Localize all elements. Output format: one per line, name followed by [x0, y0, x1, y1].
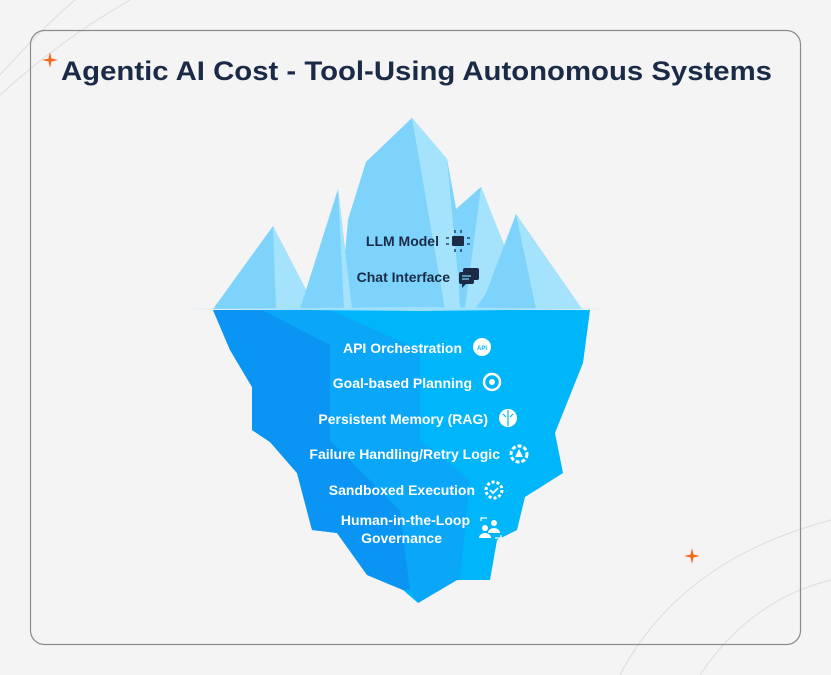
item: Human-in-the-Loop Governance — [341, 512, 501, 546]
item: Sandboxed Execution: Sandboxed Execution — [329, 482, 475, 498]
text: Chat Interface — [357, 268, 479, 288]
text: Chat Interface: Chat Interface — [357, 269, 450, 285]
iceberg: above water — [213, 118, 582, 309]
item: API Orchestration: API Orchestration — [343, 340, 462, 356]
icon: sparkle top-left — [42, 52, 58, 68]
list: underwater items — [309, 338, 527, 546]
item: API Orchestration: API — [477, 346, 487, 352]
item: Human-in-the-Loop Governance: Human-in-the-Loop — [341, 512, 470, 528]
item: Human-in-the-Loop Governance: Governance — [361, 530, 442, 546]
icon: chat bubbles — [459, 268, 479, 288]
item: Goal-based Planning: Goal-based Planning — [333, 375, 472, 391]
item: Failure Handling: Failure Handling/Retry Logic — [309, 446, 500, 462]
waterline — [187, 307, 607, 311]
iceberg: underwater — [213, 310, 590, 603]
text: LLM Model — [366, 230, 470, 252]
icon: chip — [446, 230, 470, 252]
title: Agentic AI Cost - Tool-Using Autonomous Systems — [61, 56, 772, 86]
icon: sparkle bottom-right — [684, 548, 700, 564]
item: Persistent Memory: Persistent Memory (RAG) — [318, 411, 488, 427]
text: LLM Model: LLM Model — [366, 233, 439, 249]
